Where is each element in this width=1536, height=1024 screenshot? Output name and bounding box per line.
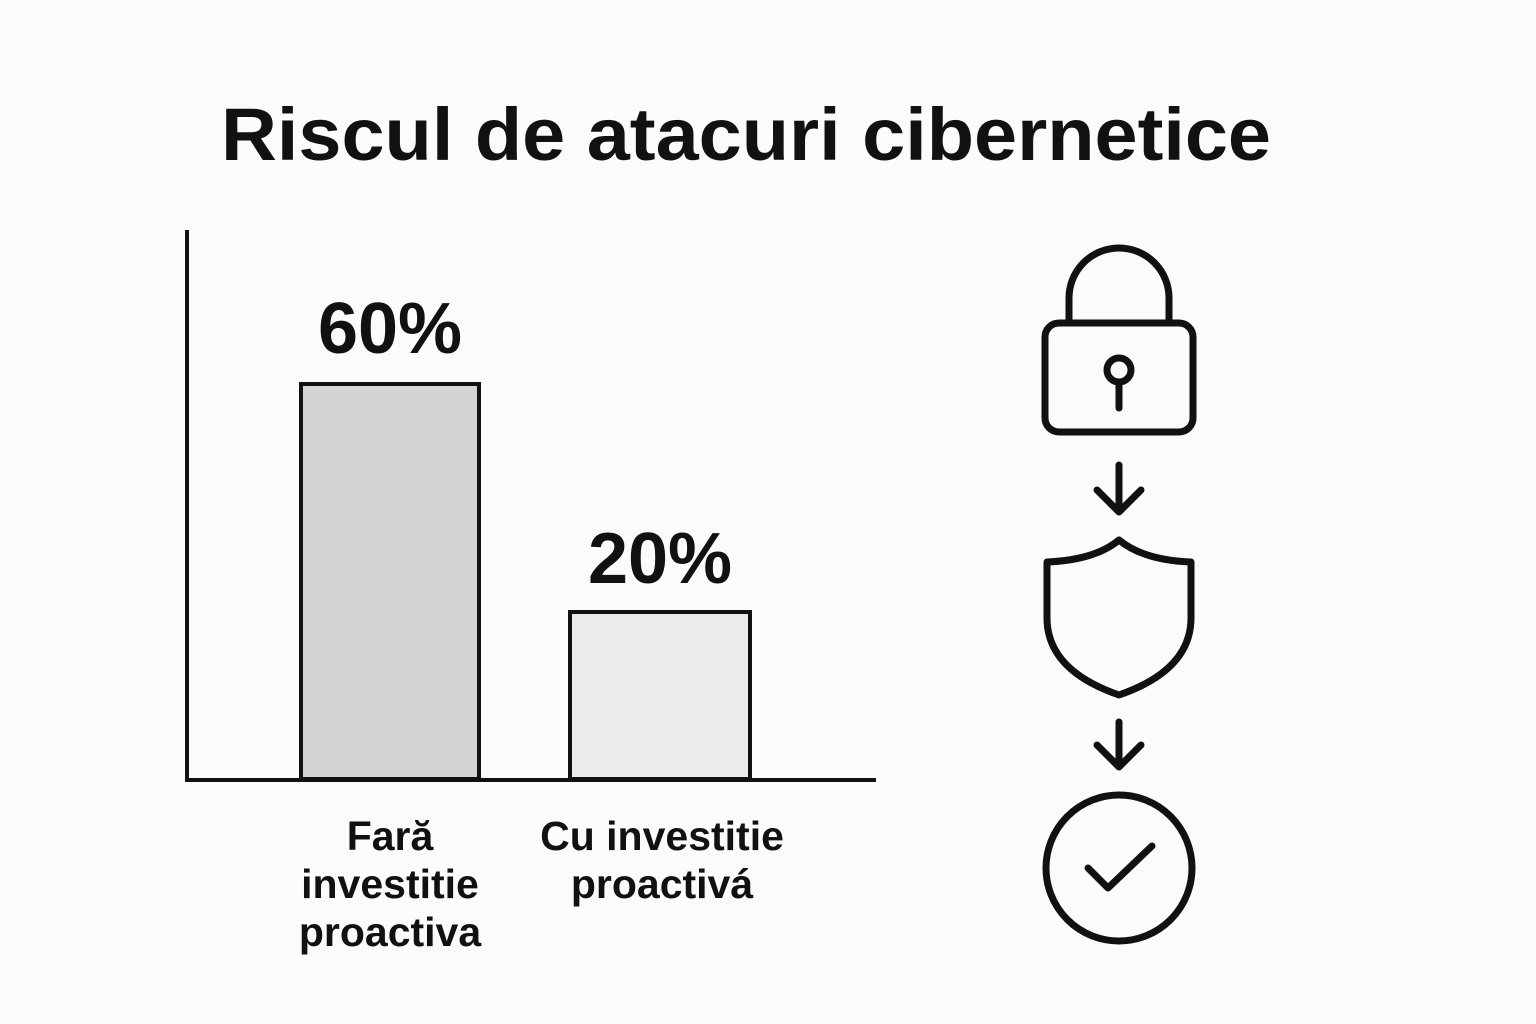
title: Riscul de atacuri cibernetice	[221, 93, 1271, 176]
value label 60%: 60%	[318, 289, 462, 369]
icon: check circle	[1046, 795, 1192, 941]
icon: shield	[1047, 540, 1191, 695]
bar: cu investitie	[570, 612, 750, 779]
category label 1: proactiva	[299, 909, 482, 955]
category label 1: Fară	[347, 813, 434, 859]
bar chart	[187, 230, 876, 955]
icon flow	[1045, 248, 1193, 941]
axes	[187, 230, 876, 780]
category label 2: proactivá	[571, 861, 753, 907]
arrow 2	[1097, 722, 1141, 767]
value label 20%: 20%	[588, 519, 732, 599]
category label 2: Cu investitie	[540, 813, 784, 859]
arrow 1	[1097, 465, 1141, 512]
bar: fara investitie	[301, 384, 479, 779]
icon: lock	[1045, 248, 1193, 432]
category label 1: investitie	[301, 861, 479, 907]
